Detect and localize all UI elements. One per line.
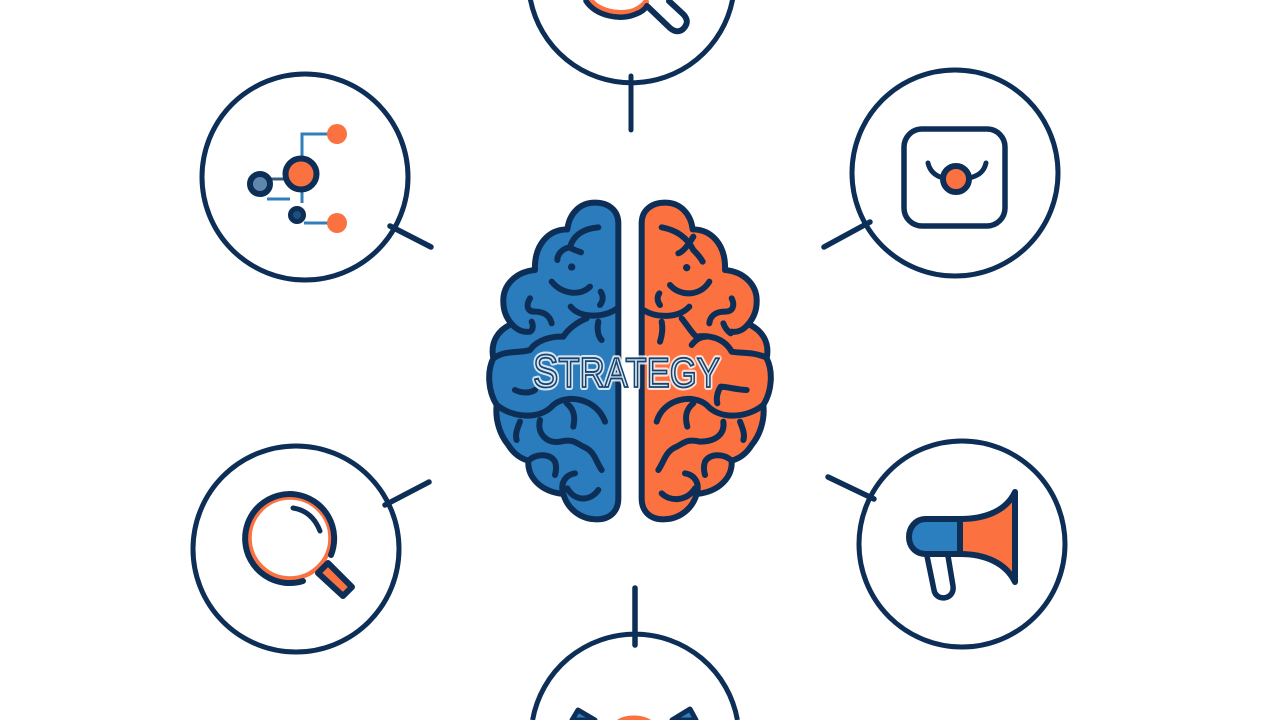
panel: bottom-right circle with megaphone [828,441,1065,647]
icon: rounded square with node [904,129,1005,226]
icon: partial gear [572,709,696,720]
center label: STRATEGY: STRATEGY [533,345,720,397]
center label: STRATEGY: STRATEGY [533,345,720,397]
left hemisphere [489,203,618,519]
panel: bottom-left circle with magnifier [193,446,429,652]
panel: bottom circle with partial icon [533,588,737,720]
panel: top-right circle with device icon [824,70,1058,276]
panel: top circle with magnifier [530,0,732,130]
right hemisphere [642,203,771,519]
icon: magnifier [245,494,352,596]
panel: top-left circle with network [202,74,431,280]
illustration: brain [489,203,771,519]
icon: network nodes [250,124,347,233]
icon: megaphone [909,492,1015,598]
